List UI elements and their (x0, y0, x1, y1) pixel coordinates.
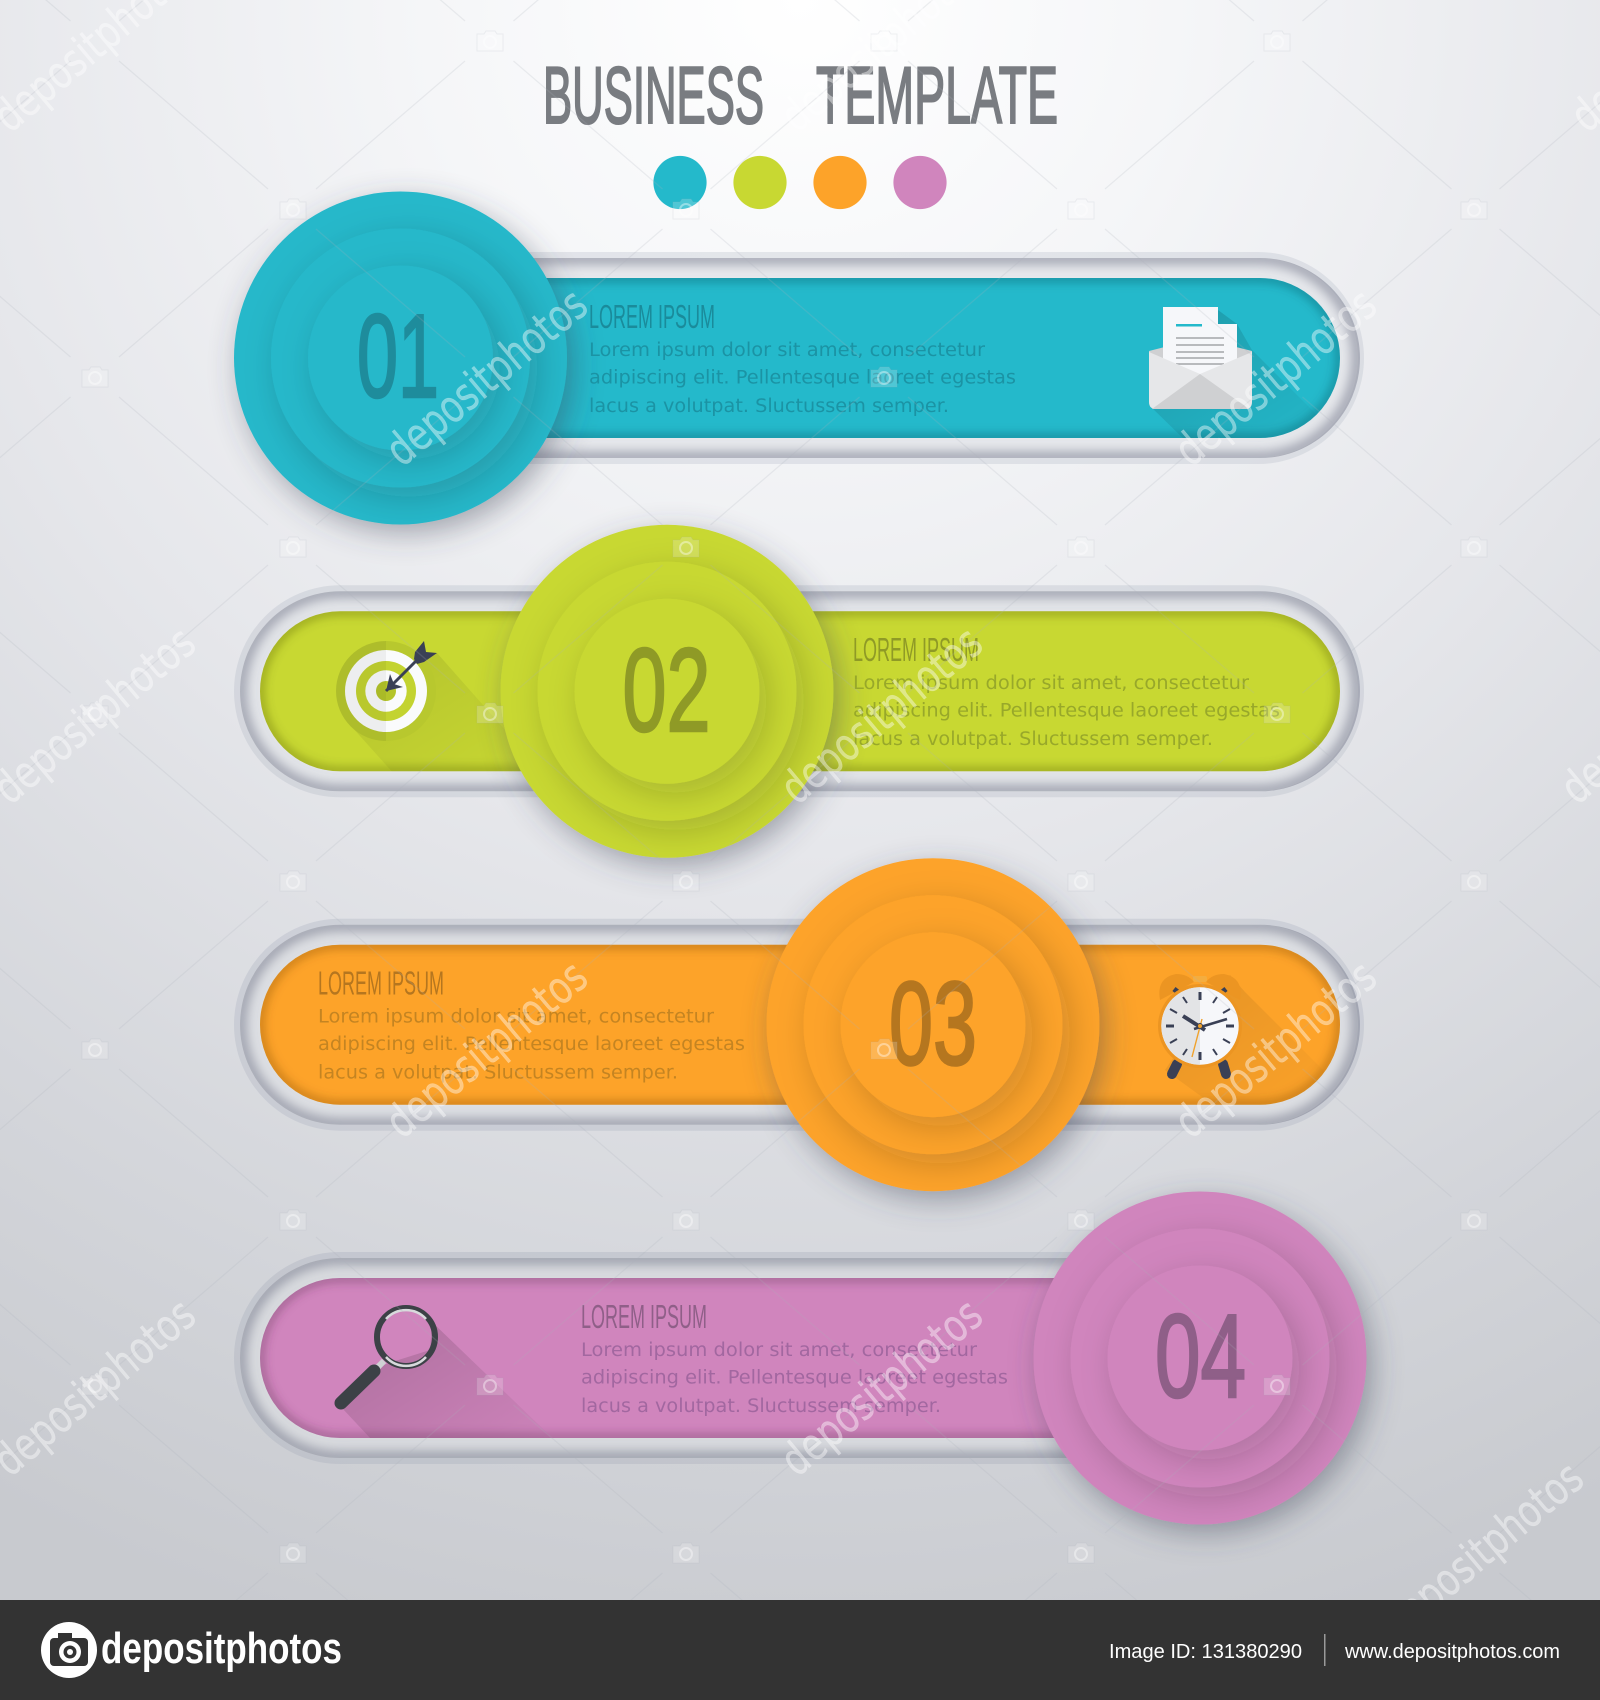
text block 01: lacus a volutpat. Sluctussem semper. (589, 396, 949, 417)
text block 03: lacus a volutpat. Sluctussem semper. (318, 1062, 678, 1084)
footer bar: depositphotos (101, 1624, 342, 1673)
panel: row 01 (234, 192, 1364, 524)
text block 04: Lorem ipsum dolor sit amet, consectetur (581, 1340, 977, 1361)
watermark text: depositphotos (1164, 950, 1387, 1148)
text block 04: adipiscing elit. Pellentesque laoreet egestas (581, 1368, 1008, 1388)
footer bar (0, 1600, 1600, 1700)
text block 04 (581, 1298, 1008, 1417)
footer bar: Image ID: 131380290 (1109, 1641, 1302, 1663)
text block 02: lacus a volutpat. Sluctussem semper. (853, 729, 1213, 750)
watermark text: depositphotos (770, 616, 993, 814)
panel: row 04 (234, 1192, 1366, 1524)
watermark camera marks (82, 31, 1487, 1563)
text block 01 (589, 298, 1016, 417)
icon: target with arrow (336, 641, 437, 741)
number circle 02 (500, 525, 834, 858)
text block 02: LOREM IPSUM (853, 631, 979, 668)
panel: row 02 (234, 525, 1364, 858)
watermark text: depositphotos (375, 278, 598, 476)
icon: magnifier (341, 1308, 435, 1403)
text block 02 (853, 631, 1280, 750)
title: TEMPLATE (816, 51, 1058, 141)
number circle 04: 04 (1155, 1290, 1246, 1423)
text block 03: Lorem ipsum dolor sit amet, consectetur (318, 1006, 714, 1028)
number circle 01 (234, 192, 567, 524)
text block 04: lacus a volutpat. Sluctussem semper. (581, 1396, 941, 1417)
number circle 03: 03 (889, 958, 977, 1090)
text block 01: Lorem ipsum dolor sit amet, consectetur (589, 340, 985, 361)
panel: row 03 (234, 858, 1364, 1191)
text block 04: LOREM IPSUM (581, 1298, 707, 1335)
text block 01: LOREM IPSUM (589, 298, 715, 335)
legend dots (653, 156, 947, 209)
icon: footer camera logo (41, 1622, 97, 1678)
number circle 04 (1034, 1192, 1366, 1524)
text block 01: adipiscing elit. Pellentesque laoreet egestas (589, 368, 1016, 388)
watermark text: depositphotos (375, 950, 598, 1148)
icon: envelope (1149, 307, 1252, 409)
number circle 03 (766, 858, 1100, 1191)
footer bar: www.depositphotos.com (1344, 1641, 1560, 1663)
text block 02: adipiscing elit. Pellentesque laoreet egestas (853, 700, 1280, 722)
title: BUSINESS (543, 51, 764, 141)
number circle 01: 01 (357, 290, 439, 423)
number circle 02: 02 (622, 624, 710, 757)
text block 03: adipiscing elit. Pellentesque laoreet egestas (318, 1034, 745, 1055)
text block 03 (318, 964, 745, 1084)
text block 03: LOREM IPSUM (318, 964, 444, 1002)
watermark text: depositphotos (770, 1288, 993, 1486)
watermark text: depositphotos (1164, 278, 1387, 476)
text block 02: Lorem ipsum dolor sit amet, consectetur (853, 673, 1249, 694)
icon: alarm clock (1158, 974, 1242, 1074)
